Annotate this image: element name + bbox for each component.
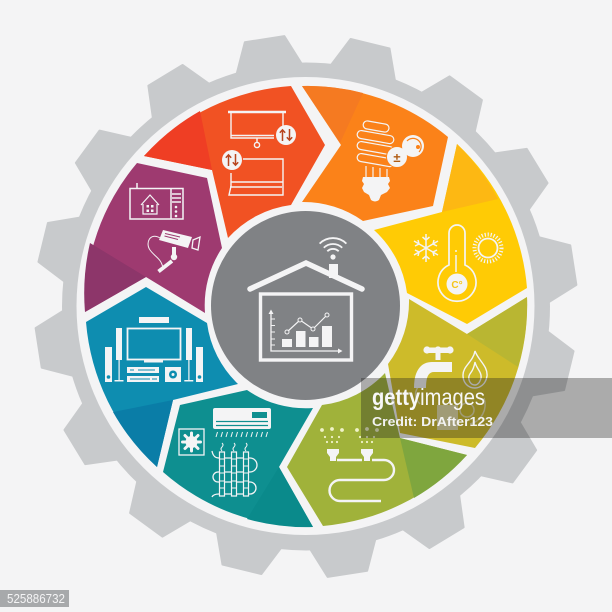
icon: heating coil grid [212,443,257,497]
icon: security camera [148,230,200,272]
light ring behind segments [76,77,534,535]
panel: home entertainment (blue) [86,287,238,467]
panel: lighting (orange) [302,86,448,221]
icon: thermometer [438,225,476,301]
panel: climate control (teal) [163,390,313,527]
watermark band: Credit: DrAfter123 [372,414,493,429]
watermark band: gettyimages [372,384,485,410]
icon: folding blind [222,150,283,195]
icon: air conditioner [213,408,271,437]
icon: gas flame [463,351,487,388]
icon: control panel [130,183,183,219]
icon: fan [179,429,204,455]
icon: spiral bulb [357,120,424,202]
panel: center hub [211,211,400,400]
icon: roller blind [228,112,296,148]
icon: thermometer: C° [451,280,463,291]
panel: water and gas (olive) [388,297,527,448]
icon: home theatre [105,317,203,382]
icon: sun [474,234,502,262]
watermark band [361,378,612,438]
icon: wifi signal [320,238,346,260]
icon: house with chart [250,263,362,360]
panel: floor heating and sprinklers (green) [287,373,467,526]
panel: window blinds (red) [144,86,325,238]
image id label: 525886732 [7,592,65,606]
panel: temperature (yellow) [374,144,527,324]
icon: snowflake [414,234,438,262]
gear background [33,34,579,579]
chart: axes and bars [268,310,342,354]
icon: sprinklers and pipe [320,427,394,501]
icon: water tap [414,346,454,388]
panel: security (purple) [84,163,222,313]
icon: spiral bulb: ± [393,150,401,165]
icon: gauges under watermark [416,387,485,430]
